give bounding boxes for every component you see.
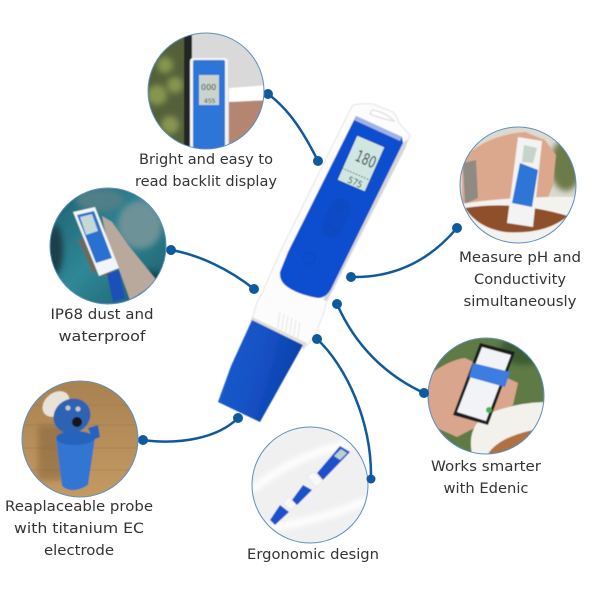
- photo: backlit display: [147, 33, 270, 155]
- buttons: [303, 194, 355, 264]
- label: simultaneous measurement: Measure pH and: [459, 250, 581, 266]
- side shading: [323, 139, 408, 301]
- LCD display: [337, 135, 385, 192]
- photo: backlit display: 455: [204, 98, 216, 105]
- label: probe: electrode: [44, 543, 114, 559]
- label: waterproof: IP68 dust and: [50, 307, 154, 323]
- hanging loop: [370, 110, 394, 121]
- connector: simultaneous measurement: [346, 223, 462, 282]
- meter body: [252, 104, 410, 346]
- hand: [462, 132, 556, 205]
- label: app: Works smarter: [431, 459, 541, 475]
- bucket: [471, 402, 544, 454]
- label: backlit display: Bright and easy to: [139, 152, 273, 168]
- photo: backlit display: 000: [201, 83, 216, 92]
- photo: simultaneous measurement: [460, 127, 582, 243]
- label: probe: with titanium EC: [14, 521, 144, 537]
- LCD display: 180: [352, 146, 379, 172]
- connector: display: [263, 89, 323, 166]
- collar ridge: [250, 317, 307, 349]
- meter: [507, 137, 542, 227]
- hand: [428, 358, 518, 437]
- label: ergonomic design: Ergonomic design: [247, 547, 379, 563]
- photo: probe: [22, 381, 138, 497]
- photo: ergonomic design: [252, 427, 368, 543]
- label: app: with Edenic: [444, 481, 529, 497]
- bucket: [460, 197, 576, 243]
- label: probe: Reaplaceable probe: [5, 499, 153, 515]
- photo: waterproof: [47, 188, 172, 304]
- connector: app: [332, 299, 424, 393]
- connector: ergonomic: [312, 334, 376, 484]
- connector end: app dot: [419, 388, 429, 398]
- label: simultaneous measurement: Conductivity: [474, 272, 566, 288]
- phone: [453, 343, 515, 425]
- label: backlit display: read backlit display: [135, 174, 277, 190]
- blue front panel: [280, 116, 403, 298]
- photo: app: [428, 335, 550, 454]
- connector: probe: [138, 413, 243, 445]
- label: waterproof: waterproof: [58, 329, 146, 345]
- LCD display: 575: [346, 176, 364, 191]
- hand: [102, 216, 158, 300]
- connector: waterproof: [166, 245, 259, 294]
- blue probe cap: [218, 320, 303, 422]
- pH meter: [218, 104, 410, 422]
- label: simultaneous measurement: simultaneously: [464, 294, 577, 310]
